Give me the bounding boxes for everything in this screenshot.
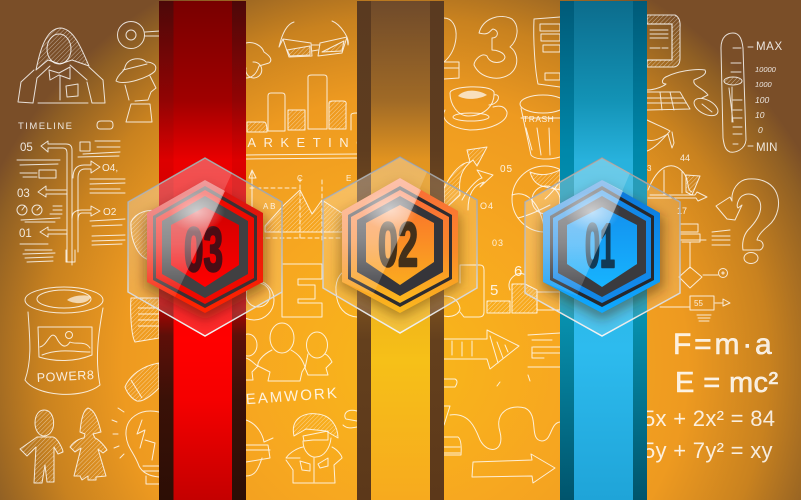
doodle: man with hat — [116, 59, 156, 122]
doodle: question mark dot — [744, 252, 758, 264]
chart: marketing bars — [247, 75, 357, 132]
small list numbers: O4 — [480, 201, 494, 211]
doodle: bell curve: 44 — [680, 153, 690, 163]
timeline labels: 03 — [17, 188, 30, 200]
doodle: document lines — [497, 333, 560, 386]
text: MARKETING: MARKETING — [229, 135, 374, 150]
doodle: power can: POWER8 — [36, 368, 95, 385]
thermometer scale labels: 100 — [755, 95, 769, 105]
doodle: letter S — [343, 410, 357, 428]
badge: 02 — [323, 157, 477, 333]
doodle: gear under glass — [131, 210, 158, 260]
ribbon: brown — [357, 1, 444, 500]
thermometer scale labels: 10 — [755, 110, 765, 120]
doodle: big right arrow — [444, 330, 519, 369]
thermometer scale labels: 1000 — [755, 80, 773, 89]
shadow 03 — [144, 186, 266, 320]
formula: 5y + 7y² = xy: 5y + 7y² = xy — [643, 438, 773, 463]
doodle: flow diagram: 55 — [694, 299, 703, 308]
timeline labels — [17, 142, 118, 240]
doodle: flow diagram — [660, 206, 730, 321]
doodle: computer with mouse — [647, 15, 721, 119]
shadow 02 — [339, 184, 461, 318]
thermometer scale labels: 0 — [758, 125, 763, 135]
formula: F = m·a: F=m·a — [673, 328, 775, 361]
chart: blocks: 5 — [490, 282, 498, 299]
glass hexagon 02 — [323, 157, 477, 333]
timeline labels: 05 — [20, 142, 33, 154]
text: TIMELINE: TIMELINE — [18, 121, 73, 132]
doodle: magnifier — [118, 22, 160, 48]
small list numbers: 05 — [500, 164, 513, 175]
glass hexagon 01 — [525, 158, 680, 336]
badge: 03 — [128, 158, 282, 336]
doodle: monitor — [131, 298, 159, 342]
doodle: girl — [18, 28, 105, 103]
doodle: teamwork people — [239, 323, 332, 381]
doodle: aviator — [286, 414, 342, 483]
ribbon: red — [159, 1, 246, 500]
doodle: winding line — [450, 407, 560, 449]
badge: 01 — [525, 158, 680, 336]
text: TEAMWORK: TEAMWORK — [234, 385, 339, 409]
glass hexagon 03 — [128, 158, 282, 336]
doodle: marketing rule and line chart — [245, 154, 358, 240]
doodle: outline arrow — [472, 454, 555, 483]
doodle: graduation cap — [647, 120, 674, 151]
doodle: question mark — [716, 179, 779, 250]
thermometer scale labels: MAX — [756, 41, 783, 53]
doodle: coffee cup — [444, 87, 507, 130]
thermometer scale labels: 10000 — [755, 65, 777, 74]
doodle: power can — [25, 287, 103, 394]
doodle: thermometer — [721, 33, 753, 152]
doodle: eraser — [125, 363, 159, 401]
line chart labels: C — [297, 174, 303, 183]
doodle: flow diagram: 17 — [677, 206, 687, 216]
doodle: trash can — [520, 95, 566, 159]
doodle: man and woman — [20, 408, 107, 483]
timeline labels: O2 — [103, 207, 117, 218]
number 03: 03 — [184, 216, 223, 285]
small list numbers: 03 — [492, 238, 504, 248]
hexagon layers 01 — [543, 180, 660, 313]
thermometer scale labels: MIN — [756, 142, 778, 154]
line chart labels: A B — [263, 202, 275, 211]
doodle: hard hat man — [246, 420, 273, 476]
doodle: curved arrows — [444, 147, 493, 210]
doodle: document — [534, 17, 560, 87]
gloss 03 — [128, 158, 232, 309]
doodle: left blocks — [444, 379, 461, 455]
formula: E = mc²: E = mc² — [675, 367, 779, 399]
shadow 01 — [541, 186, 664, 320]
doodle: glasses — [279, 21, 348, 57]
gloss 01 — [525, 158, 630, 309]
number 02: 02 — [378, 211, 418, 280]
doodle: bell curve — [647, 153, 707, 201]
small list numbers — [480, 164, 513, 248]
timeline labels: O4, — [102, 163, 118, 174]
gloss 02 — [323, 157, 427, 303]
ribbon: blue — [560, 1, 647, 500]
chart: blocks — [444, 263, 560, 317]
timeline labels: 01 — [19, 228, 32, 240]
line chart labels: E — [346, 174, 351, 183]
doodle: timeline tree — [17, 121, 125, 265]
hexagon layers 03 — [147, 180, 263, 313]
doodle: trash can: TRASH — [523, 114, 554, 124]
doodle: car — [246, 43, 271, 78]
doodle: light bulb — [112, 408, 159, 484]
doodle: number 2 and 3 — [444, 17, 517, 79]
doodle: letter E and C — [234, 264, 357, 320]
doodle: bell curve: 3 — [647, 164, 652, 173]
line chart labels — [263, 174, 351, 211]
chart: blocks: 6 — [514, 263, 522, 280]
formula: 5x + 2x² = 84: 5x + 2x² = 84 — [643, 406, 775, 431]
badge: 01: 01 — [585, 212, 615, 281]
doodle: pie ball — [512, 166, 578, 232]
thermometer scale labels — [755, 41, 783, 154]
hexagon layers 02 — [342, 178, 458, 313]
